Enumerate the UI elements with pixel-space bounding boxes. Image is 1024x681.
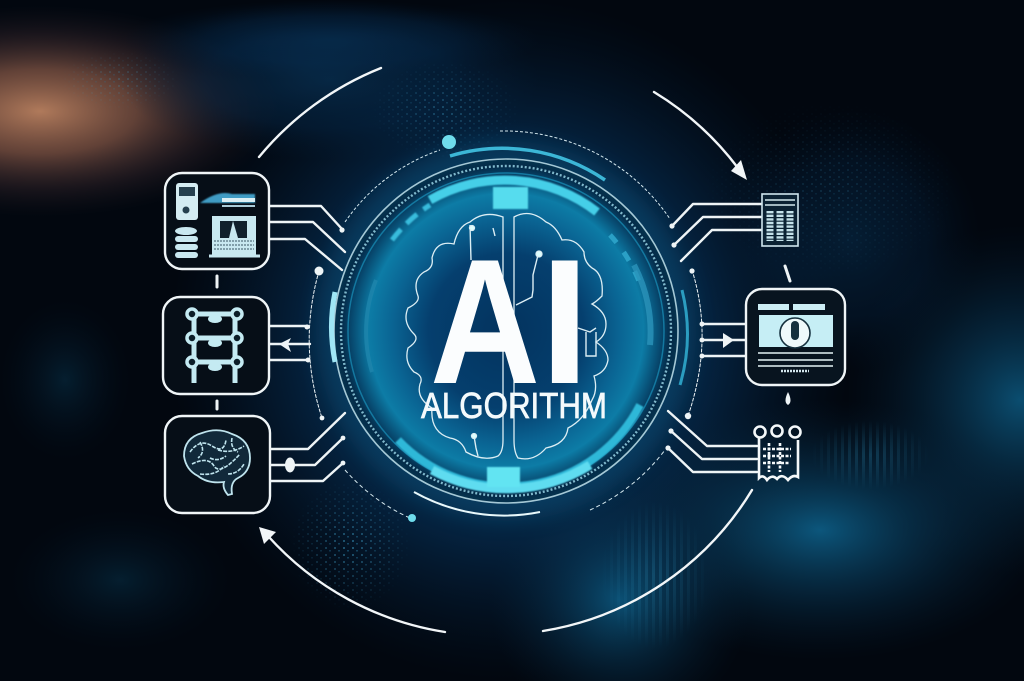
icon: glowing data stream	[200, 193, 255, 207]
dashed orbit with nodes	[345, 131, 670, 522]
brain outline	[406, 213, 608, 459]
connectors: right	[665, 204, 790, 472]
icon: circuit chip	[754, 426, 800, 480]
icon: device	[176, 183, 198, 220]
panel: brain	[165, 416, 270, 513]
subtitle: ALGORITHM: ALGORITHM	[421, 385, 607, 426]
central AI disc	[316, 131, 696, 522]
large cycle arcs with arrows	[259, 68, 752, 632]
icon: table document	[762, 194, 798, 246]
title: AI: I	[540, 222, 589, 421]
icon: laptop	[209, 216, 260, 256]
icon: database	[175, 227, 198, 258]
title: AI: A	[430, 222, 540, 421]
ring: outer glow and bands	[331, 148, 687, 516]
panel: web page	[746, 289, 845, 385]
connectors: left	[217, 206, 345, 481]
panel: data and hardware icons	[165, 173, 269, 269]
panel: network nodes	[163, 297, 269, 394]
